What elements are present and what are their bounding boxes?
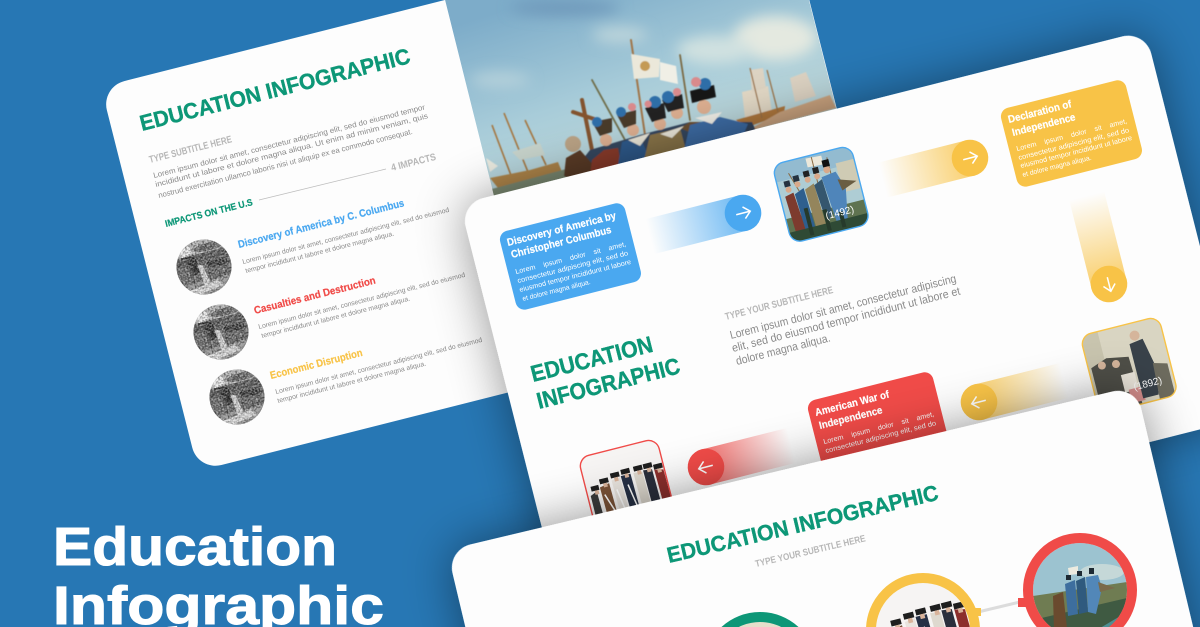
title: EDUCATION INFOGRAPHIC bbox=[664, 480, 941, 568]
image: 1492 bbox=[772, 145, 870, 244]
panel: circles slide bbox=[447, 386, 1200, 627]
icon: engraving bbox=[176, 240, 232, 294]
panel: timeline slide bbox=[460, 31, 1200, 592]
card: discovery bbox=[498, 201, 643, 312]
left ships bbox=[486, 113, 574, 198]
arrow: blue bbox=[645, 191, 765, 254]
card: declaration bbox=[999, 78, 1144, 189]
right ships bbox=[736, 68, 836, 132]
arrow: yellow right bbox=[878, 136, 992, 198]
image: 1492: (1492) bbox=[825, 204, 855, 222]
arrow: yellow left bbox=[957, 363, 1069, 424]
item text: Lorem ipsum dolor sit amet, consectetur adipiscing elit, sed do eiusmod bbox=[275, 337, 483, 396]
card: american war bbox=[806, 370, 951, 481]
subtitle: TYPE YOUR SUBTITLE HERE bbox=[724, 285, 835, 323]
panel background bbox=[447, 386, 1200, 627]
intro paragraph: incididunt ut labore et dolore magna aliqua. Ut enim ad minim veniam, quis bbox=[154, 111, 429, 189]
card text: declaration: Independence bbox=[1011, 111, 1077, 139]
crowd base bbox=[585, 122, 756, 164]
icon: engraving bbox=[210, 370, 264, 424]
card text: declaration: eiusmod tempor incididunt ut labore bbox=[1020, 135, 1133, 170]
card text: discovery bbox=[506, 210, 632, 303]
card text: declaration: consectetur adipiscing elit, sed do bbox=[1018, 127, 1130, 162]
item text: tempor incididunt ut labore et dolore magna aliqua. bbox=[245, 231, 395, 275]
item heading: Casualties and Destruction bbox=[253, 275, 377, 317]
item text: tempor incididunt ut labore et dolore magna aliqua. bbox=[277, 361, 427, 405]
card text: declaration bbox=[1007, 98, 1133, 179]
impact item: economic bbox=[203, 337, 483, 431]
card text: declaration: Declaration of bbox=[1007, 98, 1073, 126]
card text: american war: Lorem ipsum dolor sit amet, bbox=[823, 411, 935, 446]
card text: discovery: et dolore magna aliqua. bbox=[522, 279, 591, 303]
intro paragraph: nostrud exercitation ullamco laboris nisi ut aliquip ex ea commodo consequat. bbox=[157, 127, 413, 200]
painting: explorers landing bbox=[445, 0, 836, 196]
card text: declaration: et dolore magna aliqua. bbox=[1022, 155, 1092, 179]
feathers bbox=[592, 117, 602, 127]
subtitle: TYPE SUBTITLE HERE bbox=[148, 134, 233, 166]
body paragraph: elit, sed do eiusmod tempor incididunt ut labore et bbox=[731, 285, 962, 355]
panel: impacts slide bbox=[101, 0, 885, 471]
card text: american war bbox=[814, 389, 937, 455]
card text: discovery: Lorem ipsum dolor sit amet, bbox=[515, 241, 627, 276]
headline: Education bbox=[53, 517, 337, 577]
panel background bbox=[460, 31, 1200, 592]
card text: american war: Independence bbox=[818, 404, 884, 432]
subtitle: TYPE YOUR SUBTITLE HERE bbox=[754, 533, 867, 570]
image: 1892 bbox=[1082, 318, 1177, 406]
timeline node: red bbox=[1018, 538, 1132, 627]
item text: Lorem ipsum dolor sit amet, consectetur adipiscing elit, sed do eiusmod bbox=[258, 272, 466, 331]
item heading: Discovery of America by C. Columbus bbox=[237, 197, 406, 251]
card text: discovery: Discovery of America by bbox=[506, 210, 617, 249]
section heading: IMPACTS ON THE U.S bbox=[164, 197, 254, 230]
title: INFOGRAPHIC bbox=[534, 353, 683, 414]
title: EDUCATION INFOGRAPHIC bbox=[137, 43, 413, 136]
arrow: red left bbox=[684, 428, 796, 489]
monk bbox=[564, 150, 592, 177]
timeline node: green bbox=[708, 617, 812, 627]
headline bbox=[53, 517, 384, 627]
impact item: discovery bbox=[176, 201, 449, 294]
card text: american war: American War of bbox=[814, 389, 891, 419]
body paragraph: dolore magna aliqua. bbox=[735, 332, 832, 368]
soldiers bbox=[590, 148, 620, 171]
impact item: casualties bbox=[187, 272, 466, 366]
item text: Lorem ipsum dolor sit amet, consectetur adipiscing elit, sed do eiusmod bbox=[242, 207, 450, 266]
card text: discovery: Christopher Columbus bbox=[510, 224, 613, 261]
card text: discovery: consectetur adipiscing elit, sed do bbox=[517, 250, 629, 285]
count label: 4 impacts: 4 IMPACTS bbox=[390, 152, 438, 174]
connector bbox=[978, 601, 1024, 612]
intro paragraph: Lorem ipsum dolor sit amet, consectetur adipiscing elit, sed do eiusmod tempor bbox=[152, 102, 426, 180]
card text: declaration: Lorem ipsum dolor sit amet, bbox=[1016, 118, 1128, 153]
item heading: Economic Disruption bbox=[269, 347, 364, 382]
body paragraph: Lorem ipsum dolor sit amet, consectetur adipiscing bbox=[729, 273, 958, 342]
image: soldiers bbox=[580, 440, 672, 516]
item text: tempor incididunt ut labore et dolore magna aliqua. bbox=[261, 296, 411, 340]
timeline node: yellow bbox=[866, 573, 981, 627]
cross and lances bbox=[573, 40, 690, 150]
image: 1892: (1892) bbox=[1133, 375, 1163, 393]
card text: american war: consectetur adipiscing elit, sed do bbox=[825, 420, 937, 455]
arrow: yellow down bbox=[1069, 191, 1131, 306]
icon: engraving bbox=[194, 304, 248, 360]
flag bbox=[631, 54, 660, 79]
title: EDUCATION bbox=[528, 331, 655, 387]
card text: discovery: eiusmod tempor incididunt ut labore bbox=[519, 259, 632, 294]
panel background bbox=[101, 0, 885, 471]
